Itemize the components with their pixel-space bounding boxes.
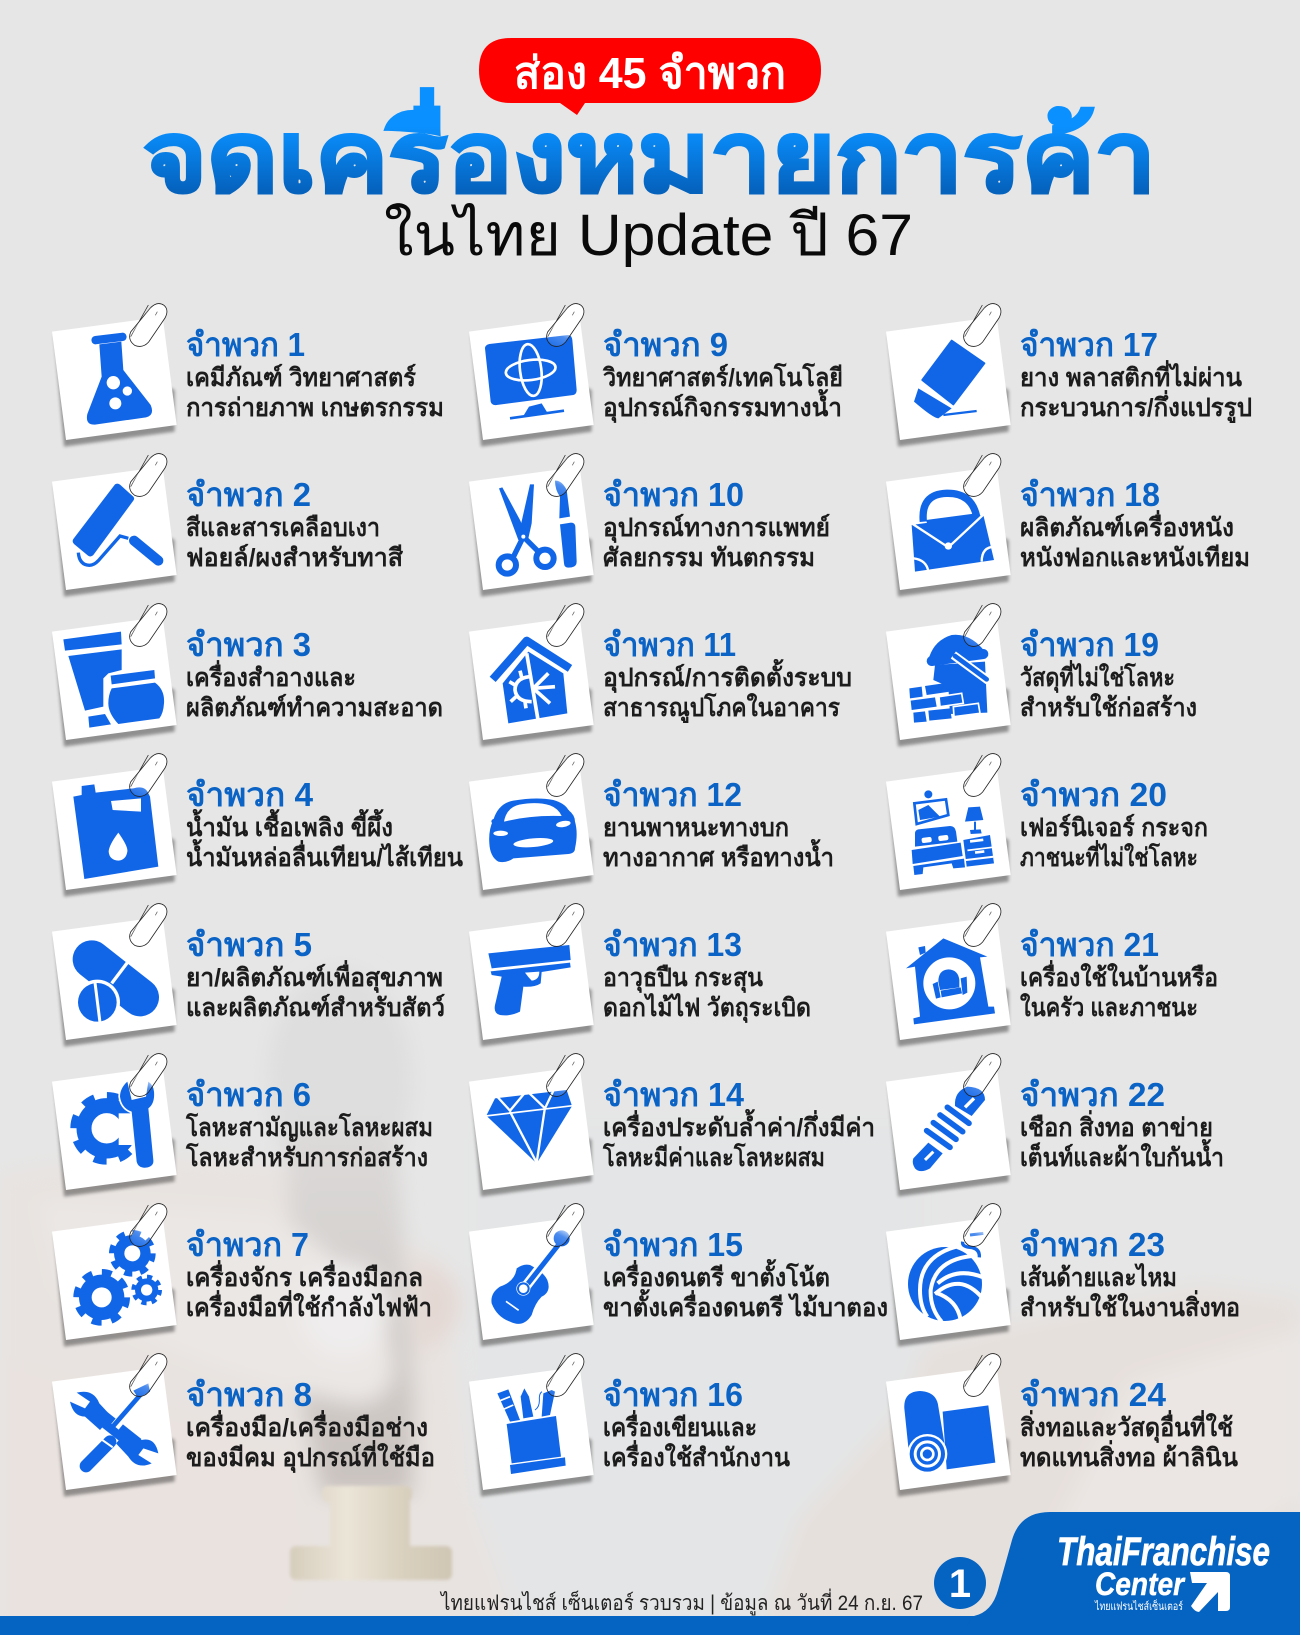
panel: จำพวก 22 — [886, 1054, 1224, 1197]
panel: จำพวก 12 — [469, 754, 834, 897]
icon: guitar — [491, 1230, 570, 1324]
paperclip — [964, 604, 1001, 646]
category heading: จำพวก 13 — [603, 926, 742, 963]
description line 1: เฟอร์นิเจอร์ กระจก — [1020, 813, 1208, 842]
description line 1: สีและสารเคลือบเงา — [186, 514, 380, 542]
category heading: จำพวก 17 — [1020, 326, 1158, 363]
description line 1: อุปกรณ์/การติดตั้งระบบ — [603, 658, 852, 694]
panel: จำพวก 20 — [886, 754, 1208, 897]
panel: จำพวก 13 — [469, 904, 811, 1047]
paperclip — [547, 304, 584, 346]
paperclip — [130, 1354, 167, 1396]
description line 2: ดอกไม้ไฟ วัตถุระเบิด — [603, 992, 811, 1024]
source note: ไทยแฟรนไชส์ เซ็นเตอร์ รวบรวม | ข้อมูล ณ วันที่ 24 ก.ย. 67 — [439, 1588, 923, 1616]
icon: house with snowflake — [493, 641, 570, 723]
panel: จำพวก 8 — [52, 1354, 435, 1497]
description line 1: เครื่องสำอางและ — [186, 660, 356, 692]
panel: จำพวก 4 — [52, 754, 463, 897]
panel: จำพวก 24 — [886, 1354, 1238, 1497]
description line 1: เครื่องดนตรี ขาตั้งโน้ต — [603, 1258, 830, 1292]
description line 2: การถ่ายภาพ เกษตรกรรม — [186, 394, 444, 422]
paperclip — [547, 1204, 584, 1246]
description line 1: สิ่งทอและวัสดุอื่นที่ใช้ — [1020, 1410, 1233, 1444]
paperclip — [547, 1054, 584, 1096]
description line 2: เครื่องมือที่ใช้กำลังไฟฟ้า — [186, 1290, 432, 1322]
icon: wrench and screwdriver — [70, 1383, 158, 1466]
paperclip — [130, 754, 167, 796]
description line 1: โลหะสามัญและโลหะผสม — [185, 1112, 433, 1142]
icon: scissors and scalpel — [499, 481, 577, 574]
description line 1: วิทยาศาสตร์/เทคโนโลยี — [602, 362, 843, 392]
description line 1: อุปกรณ์ทางการแพทย์ — [603, 513, 830, 544]
panel: จำพวก 5 — [52, 904, 445, 1047]
category heading: จำพวก 24 — [1020, 1376, 1167, 1413]
paperclip — [130, 904, 167, 946]
icon: flask — [87, 332, 152, 425]
description line 1: น้ำมัน เชื้อเพลิง ขี้ผึ้ง — [186, 808, 393, 842]
subtitle: ในไทย Update ปี 67 — [384, 202, 913, 268]
page number badge — [934, 1557, 986, 1609]
panel: จำพวก 15 — [469, 1204, 888, 1347]
category heading: จำพวก 10 — [603, 476, 744, 513]
red callout badge — [479, 38, 821, 115]
paperclip — [964, 1354, 1001, 1396]
description line 2: ขาตั้งเครื่องดนตรี ไม้บาตอง — [603, 1288, 888, 1322]
description line 2: ฟอยล์/ผงสำหรับทาสี — [186, 543, 404, 572]
description line 2: ทดแทนสิ่งทอ ผ้าลินิน — [1020, 1440, 1238, 1472]
description line 2: น้ำมันหล่อลื่นเทียน/ไส้เทียน — [186, 838, 463, 872]
category heading: จำพวก 2 — [186, 476, 311, 513]
description line 2: สำหรับใช้ก่อสร้าง — [1020, 692, 1197, 722]
description line 2: ภาชนะที่ไม่ใช่โลหะ — [1020, 840, 1198, 872]
icon: pen holder — [497, 1388, 566, 1474]
panel: จำพวก 6 — [52, 1054, 433, 1197]
category heading: จำพวก 22 — [1020, 1076, 1165, 1113]
category heading: จำพวก 7 — [186, 1226, 309, 1263]
panel: จำพวก 3 — [52, 604, 443, 747]
icon: fabric roll — [904, 1391, 995, 1474]
description line 2: กระบวนการ/กึ่งแปรรูป — [1020, 390, 1252, 424]
description line 2: สาธารณูปโภคในอาคาร — [603, 692, 841, 724]
description line 2: เต็นท์และผ้าใบกันน้ำ — [1020, 1138, 1224, 1172]
icon: ball of yarn — [908, 1233, 983, 1322]
description line 2: และผลิตภัณฑ์สำหรับสัตว์ — [186, 993, 445, 1022]
category heading: จำพวก 15 — [603, 1226, 743, 1263]
description line 1: เชือก สิ่งทอ ตาข่าย — [1020, 1110, 1213, 1142]
description line 1: เส้นด้ายและไหม — [1020, 1262, 1177, 1292]
icon: monitor with atom — [485, 335, 577, 418]
icon: rope — [913, 1087, 985, 1171]
icon: pistol — [488, 945, 571, 1015]
description line 1: วัสดุที่ไม่ใช่โลหะ — [1020, 660, 1175, 694]
description line 1: เครื่องจักร เครื่องมือกล — [186, 1260, 423, 1292]
category heading: จำพวก 8 — [186, 1376, 312, 1413]
icon: leather bag — [912, 493, 995, 572]
icon: eraser — [914, 341, 984, 418]
category heading: จำพวก 19 — [1020, 626, 1159, 663]
icon: gears — [76, 1233, 160, 1323]
paperclip — [130, 304, 167, 346]
category heading: จำพวก 6 — [186, 1076, 311, 1113]
description line 2: หนังฟอกและหนังเทียม — [1020, 544, 1250, 572]
description line 1: ผลิตภัณฑ์เครื่องหนัง — [1020, 510, 1234, 542]
category heading: จำพวก 3 — [186, 626, 311, 663]
panel: จำพวก 7 — [52, 1204, 432, 1347]
paperclip — [547, 1354, 584, 1396]
paperclip — [547, 604, 584, 646]
description line 2: ผลิตภัณฑ์ทำความสะอาด — [186, 693, 443, 722]
panel: จำพวก 21 — [886, 904, 1218, 1047]
paperclip — [964, 1204, 1001, 1246]
description line 1: ยาง พลาสติกที่ไม่ผ่าน — [1020, 360, 1242, 392]
category heading: จำพวก 14 — [603, 1076, 745, 1113]
category heading: จำพวก 23 — [1020, 1226, 1165, 1263]
description line 1: ยา/ผลิตภัณฑ์เพื่อสุขภาพ — [186, 960, 443, 994]
category heading: จำพวก 5 — [186, 926, 312, 963]
description line 1: เครื่องประดับล้ำค่า/กึ่งมีค่า — [603, 1108, 875, 1142]
icon: bedroom furniture — [912, 790, 994, 875]
paperclip — [964, 304, 1001, 346]
icon: logo arrow — [1190, 1572, 1230, 1612]
panel: จำพวก 19 — [886, 604, 1197, 747]
paperclip — [130, 1204, 167, 1246]
paperclip — [547, 754, 584, 796]
icon: car — [489, 798, 577, 862]
footer band and logo panel — [0, 1512, 1300, 1635]
paperclip — [130, 604, 167, 646]
paperclip — [547, 454, 584, 496]
icon: pills — [75, 959, 140, 1025]
main title: จดเครื่องหมายการค้า — [143, 88, 1156, 212]
description line 1: อาวุธปืน กระสุน — [603, 964, 763, 994]
panel: จำพวก 14 — [469, 1054, 875, 1197]
description line 2: โลหะมีค่าและโลหะผสม — [602, 1142, 825, 1172]
icon: diamond — [487, 1089, 572, 1163]
icon: paint roller — [73, 484, 158, 565]
paperclip — [130, 1054, 167, 1096]
description line 1: เคมีภัณฑ์ วิทยาศาสตร์ — [186, 363, 417, 392]
description line 2: ของมีคม อุปกรณ์ที่ใช้มือ — [186, 1440, 435, 1474]
description line 1: เครื่องใช้ในบ้านหรือ — [1020, 960, 1218, 992]
category heading: จำพวก 9 — [603, 326, 728, 363]
icon: house with armchair — [906, 938, 995, 1024]
paperclip — [964, 754, 1001, 796]
description line 2: โลหะสำหรับการก่อสร้าง — [185, 1142, 428, 1172]
category heading: จำพวก 4 — [186, 776, 314, 813]
icon: gear and wrench — [75, 1082, 154, 1168]
panel: จำพวก 17 — [886, 304, 1252, 447]
description line 2: ทางอากาศ หรือทางน้ำ — [603, 838, 834, 872]
panel: จำพวก 16 — [469, 1354, 790, 1497]
panel: จำพวก 18 — [886, 454, 1250, 597]
paperclip — [964, 454, 1001, 496]
panel: จำพวก 23 — [886, 1204, 1240, 1347]
category heading: จำพวก 11 — [603, 626, 736, 663]
brand sub name: Center — [1095, 1566, 1185, 1602]
category heading: จำพวก 16 — [603, 1376, 743, 1413]
page number badge: 1 — [949, 1562, 971, 1606]
description line 2: อุปกรณ์กิจกรรมทางน้ำ — [603, 388, 842, 424]
description line 1: เครื่องมือ/เครื่องมือช่าง — [186, 1410, 428, 1442]
icon: oil can — [73, 784, 158, 879]
description line 1: ยานพาหนะทางบก — [603, 814, 789, 842]
category heading: จำพวก 18 — [1020, 476, 1160, 513]
panel: จำพวก 1 — [52, 304, 444, 447]
description line 2: ศัลยกรรม ทันตกรรม — [603, 544, 815, 572]
paperclip — [964, 1054, 1001, 1096]
description line 2: เครื่องใช้สำนักงาน — [603, 1440, 790, 1472]
icon: bricks and cement bucket — [909, 635, 988, 723]
brand Thai name: ไทยแฟรนไชส์เซ็นเตอร์ — [1094, 1599, 1183, 1613]
red callout badge: ส่อง 45 จำพวก — [514, 49, 786, 98]
category heading: จำพวก 21 — [1020, 926, 1159, 963]
description line 1: เครื่องเขียนและ — [603, 1410, 757, 1442]
paperclip — [964, 904, 1001, 946]
panel: จำพวก 9 — [469, 304, 843, 447]
category heading: จำพวก 12 — [603, 776, 742, 813]
paperclip — [547, 904, 584, 946]
icon: cosmetics — [63, 632, 164, 728]
panel: จำพวก 11 — [469, 604, 852, 747]
panel: จำพวก 10 — [469, 454, 830, 597]
category heading: จำพวก 20 — [1020, 776, 1167, 813]
paperclip — [130, 454, 167, 496]
description line 2: สำหรับใช้ในงานสิ่งทอ — [1020, 1290, 1240, 1322]
category heading: จำพวก 1 — [186, 326, 305, 363]
description line 2: ในครัว และภาชนะ — [1020, 992, 1198, 1022]
panel: จำพวก 2 — [52, 454, 404, 597]
